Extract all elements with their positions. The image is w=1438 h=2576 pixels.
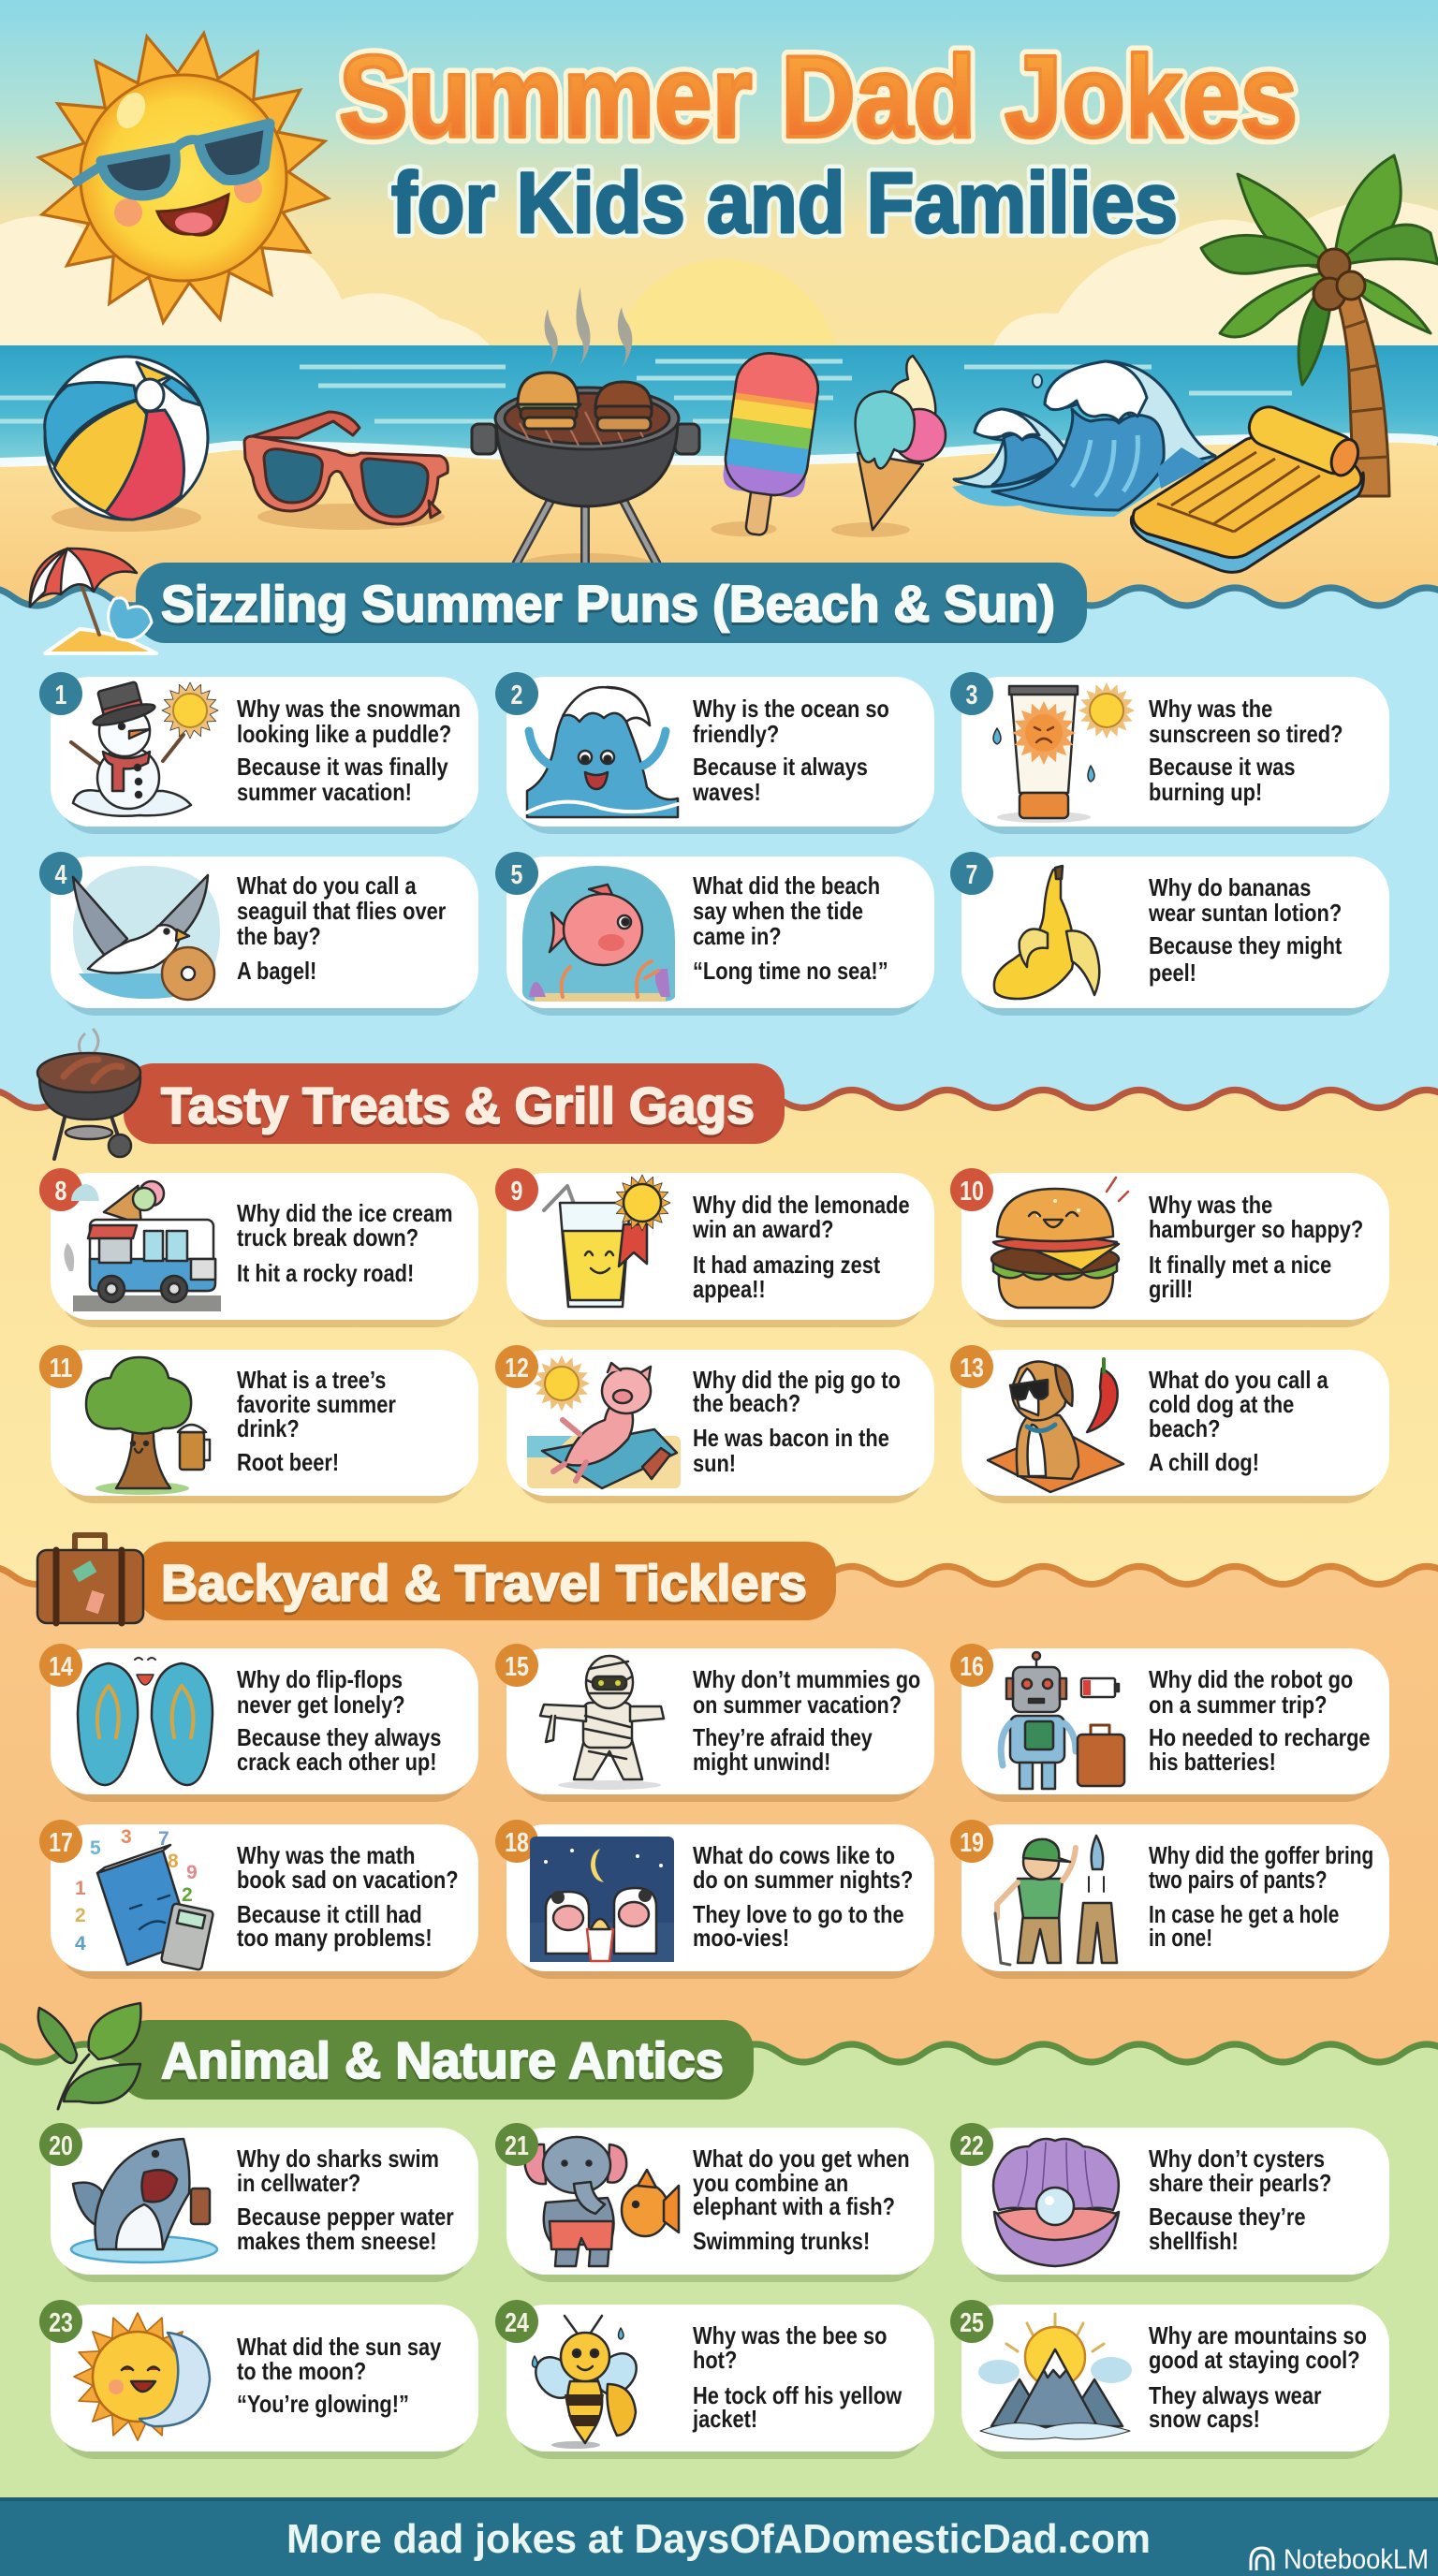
joke text: too many problems! (237, 1925, 433, 1952)
joke text: friendly? (693, 721, 779, 748)
joke text: sun! (693, 1450, 736, 1477)
joke text: seaguil that flies over (237, 898, 446, 925)
joke card 20 (39, 2123, 478, 2282)
joke text: Why did the robot go (1149, 1666, 1353, 1693)
badge 18: 18 (505, 1826, 529, 1858)
section heading: Backyard and Travel (138, 1542, 836, 1620)
joke text: Why was the bee so (693, 2322, 887, 2349)
joke text: It had amazing zest (693, 1251, 880, 1279)
joke text: on a summer trip? (1149, 1691, 1327, 1719)
joke text: Because pepper water (237, 2203, 454, 2231)
badge 2 (495, 672, 538, 715)
joke text: He was bacon in the (693, 1425, 889, 1452)
badge 14: 14 (49, 1650, 73, 1682)
joke text: Because it was (1149, 754, 1296, 781)
badge 7 (950, 852, 993, 895)
icon: sunbathing pig (527, 1355, 681, 1488)
icon: ice cream cone (831, 356, 946, 537)
joke text: his batteries! (1149, 1749, 1276, 1776)
badge 9: 9 (511, 1175, 522, 1207)
joke text: What did the beach (693, 872, 880, 900)
section heading: Sizzling Summer Puns (136, 563, 1087, 643)
joke card 24 (495, 2300, 934, 2459)
clouds (0, 200, 1438, 348)
joke text: Why did the goffer bring (1149, 1842, 1373, 1869)
badge 11: 11 (50, 1352, 72, 1383)
joke text: book sad on vacation? (237, 1866, 459, 1894)
joke text: shellfish! (1149, 2228, 1239, 2255)
icon: smiling sun with sunglasses (19, 13, 348, 343)
icon: grill with burgers (472, 286, 699, 576)
badge 4: 4 (55, 858, 67, 890)
joke text: cold dog at the (1149, 1391, 1294, 1418)
subtitle: for Kids and Families (391, 155, 1178, 251)
badge 19 (950, 1820, 993, 1863)
joke text: looking like a puddle? (237, 721, 451, 748)
joke card 25 (950, 2300, 1389, 2459)
joke card 18 (495, 1820, 934, 1979)
section heading: Animal and Nature (119, 2020, 754, 2100)
joke card 23 (39, 2300, 478, 2459)
icon: happy hamburger (991, 1178, 1128, 1308)
badge 5: 5 (511, 858, 522, 890)
joke text: appea!! (693, 1276, 766, 1303)
badge 3: 3 (966, 679, 977, 710)
icon: sad math book: 2 (75, 1905, 86, 1926)
joke text: do on summer nights? (693, 1866, 913, 1894)
icon: sad math book: 3 (121, 1826, 132, 1848)
icon: melting snowman (71, 679, 218, 816)
joke text: two pairs of pants? (1149, 1866, 1328, 1894)
icon: elephant with fish (525, 2137, 679, 2266)
badge 25 (950, 2300, 993, 2343)
joke text: hamburger so happy? (1149, 1216, 1363, 1243)
badge 21 (495, 2123, 538, 2166)
joke text: share their pearls? (1149, 2170, 1331, 2197)
joke text: truck break down? (237, 1224, 418, 1251)
icon: seagull with bagel (73, 866, 220, 1000)
wave edge: section 4 (0, 2044, 1438, 2062)
joke text: A chill dog! (1149, 1449, 1259, 1476)
joke card 4 (39, 852, 478, 1016)
section background: beach and sun (0, 588, 1438, 1123)
joke text: What do cows like to (693, 1842, 895, 1869)
section background: tasty treats (0, 1090, 1438, 1591)
icon: ocean wave (952, 361, 1217, 517)
icon: palm tree (1201, 155, 1438, 496)
joke text: What is a tree’s (237, 1367, 386, 1394)
icon: robot with suitcase (1001, 1652, 1124, 1789)
joke text: in one! (1149, 1925, 1212, 1952)
joke text: Because it was finally (237, 754, 448, 781)
icon: mummy (540, 1656, 664, 1790)
joke card 7 (950, 852, 1389, 1016)
joke card 9 (495, 1168, 934, 1327)
joke text: Root beer! (237, 1449, 339, 1476)
badge 24 (495, 2300, 538, 2343)
icon: golfer with spare pants (995, 1836, 1117, 1965)
icon: sad math book: 1 (75, 1878, 86, 1899)
section background: backyard and travel (0, 1567, 1438, 2069)
joke text: beach? (1149, 1415, 1220, 1442)
joke text: jacket! (692, 2406, 757, 2433)
joke text: He tock off his yellow (693, 2382, 902, 2409)
joke text: It finally met a nice (1149, 1251, 1331, 1279)
joke text: What do you get when (693, 2145, 910, 2173)
joke text: came in? (693, 923, 782, 950)
joke text: elephant with a fish? (693, 2193, 895, 2220)
badge 10: 10 (960, 1175, 984, 1207)
badge 23 (39, 2300, 82, 2343)
joke text: They’re afraid they (693, 1724, 873, 1752)
badge 22 (950, 2123, 993, 2166)
badge 15 (495, 1644, 538, 1687)
section heading: Tasty Treats (124, 1063, 785, 1144)
joke text: Why was the (1149, 1192, 1272, 1219)
icon: ice cream truck (64, 1178, 221, 1311)
joke text: drink? (237, 1415, 300, 1442)
joke text: say when the tide (693, 898, 863, 925)
joke card 2 (495, 672, 934, 834)
badge 20: 20 (49, 2130, 73, 2161)
joke text: Why don’t mummies go (693, 1666, 920, 1694)
joke text: to the moon? (237, 2358, 366, 2385)
joke text: wear suntan lotion? (1148, 900, 1342, 927)
badge 13: 13 (960, 1352, 984, 1383)
joke text: summer vacation! (237, 779, 412, 806)
badge 23: 23 (49, 2306, 73, 2338)
shoreline foam (0, 437, 1438, 462)
badge 17 (39, 1820, 82, 1863)
section heading: Sizzling Summer Puns: Sizzling Summer Puns (Beach & Sun) (161, 575, 1055, 633)
badge 17: 17 (49, 1826, 73, 1858)
wave edge: section 1 (0, 588, 1438, 606)
icon: tree with root beer (86, 1357, 210, 1495)
badge 16 (950, 1644, 993, 1687)
joke text: in cellwater? (237, 2170, 360, 2197)
joke text: favorite summer (237, 1391, 396, 1418)
joke text: Why are mountains so (1149, 2322, 1367, 2349)
joke card 5 (495, 852, 934, 1016)
badge 8 (39, 1168, 82, 1211)
badge 11 (39, 1345, 82, 1388)
badge 1 (39, 672, 82, 715)
joke text: Why was the snowman (237, 695, 461, 723)
badge 7: 7 (966, 858, 977, 890)
icon: beach ball (45, 357, 208, 532)
joke text: Because they always (237, 1724, 441, 1751)
badge 13 (950, 1345, 993, 1388)
badge 12 (495, 1345, 538, 1388)
badge 10 (950, 1168, 993, 1211)
section background: animal and nature (0, 2044, 1438, 2509)
joke card 13 (950, 1345, 1389, 1503)
badge 18 (495, 1820, 538, 1863)
wave edge: section 3 (0, 1567, 1438, 1584)
joke text: A bagel! (237, 958, 316, 985)
icon: beach umbrella and wave (30, 549, 156, 653)
icon: sad math book: 8 (168, 1851, 179, 1872)
joke text: you combine an (693, 2170, 848, 2197)
joke text: They love to go to the (693, 1901, 904, 1928)
joke text: What do you call a (237, 872, 417, 900)
joke text: waves! (692, 779, 761, 806)
joke text: Because they’re (1149, 2203, 1305, 2231)
icon: flip-flops (78, 1658, 213, 1785)
joke card 21 (495, 2123, 934, 2282)
section heading: Animal and Nature: Animal & Nature Antics (161, 2031, 724, 2089)
joke text: Why do bananas (1149, 874, 1311, 901)
joke card 19 (950, 1820, 1389, 1979)
badge 15: 15 (505, 1650, 529, 1682)
title: Summer Dad Jokes (339, 33, 1298, 162)
icon: lemonade with award (544, 1175, 670, 1307)
joke text: Why did the ice cream (237, 1200, 453, 1227)
badge 20 (39, 2123, 82, 2166)
icon: cows at the movies (530, 1837, 674, 1962)
badge 21: 21 (505, 2130, 529, 2161)
joke text: moo-vies! (693, 1925, 789, 1952)
joke text: Why was the (1149, 695, 1272, 723)
joke text: sunscreen so tired? (1149, 721, 1343, 748)
joke text: the beach? (693, 1390, 800, 1417)
joke card 15 (495, 1644, 934, 1802)
joke text: good at staying cool? (1149, 2347, 1360, 2374)
icon: sneezing shark (71, 2139, 217, 2262)
badge 9 (495, 1168, 538, 1211)
joke text: crack each other up! (237, 1749, 437, 1776)
badge 12: 12 (505, 1352, 529, 1383)
joke text: on summer vacation? (693, 1691, 902, 1720)
title: Summer Dad Jokes (339, 33, 1298, 162)
icon: friendly ocean wave (527, 687, 678, 817)
joke text: Swimming trunks! (693, 2228, 870, 2255)
icon: rainbow popsicle (709, 348, 822, 549)
joke text: burning up! (1149, 779, 1262, 806)
joke card 17 (39, 1820, 478, 1979)
joke text: Why was the math (237, 1842, 415, 1869)
icon: red sunglasses (244, 412, 448, 530)
ocean (0, 345, 1438, 472)
icon: pink fish underwater (522, 866, 675, 1002)
icon: pearl in shell (993, 2139, 1119, 2266)
badge 16: 16 (960, 1650, 984, 1682)
subtitle: for Kids and Families (391, 155, 1178, 251)
joke text: never get lonely? (237, 1691, 405, 1719)
joke text: makes them sneese! (237, 2228, 437, 2255)
joke text: Because it always (693, 754, 868, 781)
joke card 12 (495, 1345, 934, 1503)
joke card 22 (950, 2123, 1389, 2282)
joke card 3 (950, 672, 1389, 834)
badge 24: 24 (505, 2306, 529, 2338)
badge 4 (39, 852, 82, 895)
footer text: More dad jokes at DaysOfADomesticDad.com (286, 2516, 1151, 2562)
icon: green leaves (38, 2003, 140, 2109)
badge 8: 8 (55, 1175, 66, 1207)
badge 25: 25 (960, 2306, 984, 2338)
icon: pool float (1131, 402, 1363, 572)
setting sun (610, 259, 839, 488)
joke text: win an award? (692, 1216, 833, 1243)
joke card 8 (39, 1168, 478, 1327)
section heading: Tasty Treats: Tasty Treats & Grill Gags (161, 1076, 755, 1134)
joke text: Because it ctill had (237, 1901, 422, 1928)
joke text: grill! (1149, 1276, 1193, 1303)
joke text: Why did the lemonade (693, 1192, 910, 1219)
section heading: Backyard and Travel: Backyard & Travel Ticklers (161, 1554, 807, 1612)
icon: hot bee (528, 2316, 644, 2449)
joke text: might unwind! (693, 1749, 830, 1777)
joke text: Why don’t cysters (1149, 2145, 1325, 2173)
wave edge: section 2 (0, 1090, 1438, 1108)
joke text: hot? (693, 2347, 737, 2374)
joke text: What do you call a (1149, 1367, 1328, 1394)
icon: sad math book: 9 (186, 1862, 198, 1883)
joke card 1 (39, 672, 478, 834)
icon: sad math book (75, 1826, 213, 1970)
joke text: In case he get a hole (1149, 1901, 1339, 1928)
icon: sad math book: 7 (158, 1828, 169, 1850)
joke text: Because they might (1149, 932, 1342, 959)
badge 22: 22 (960, 2130, 984, 2161)
icon: kettle grill (37, 1030, 140, 1159)
badge 1: 1 (55, 679, 66, 710)
joke text: Why do flip-flops (237, 1666, 403, 1693)
joke card 11 (39, 1345, 478, 1503)
joke text: snow caps! (1149, 2406, 1260, 2433)
joke text: the bay? (237, 923, 321, 950)
icon: suitcase (37, 1535, 143, 1623)
footer band (0, 2497, 1438, 2576)
badge 14 (39, 1644, 82, 1687)
joke text: “Long time no sea!” (693, 958, 888, 985)
icon: sad math book: 2 (182, 1884, 193, 1906)
joke card 10 (950, 1168, 1389, 1327)
icon: dog with sunglasses and chili (988, 1359, 1123, 1492)
sky background (0, 0, 1438, 348)
joke text: Why did the pig go to (693, 1367, 901, 1394)
badge 3 (950, 672, 993, 715)
badge 19: 19 (960, 1826, 984, 1858)
icon: sad math book: 4 (75, 1933, 86, 1954)
joke text: Ho needed to recharge (1149, 1724, 1371, 1751)
joke text: “You’re glowing!” (237, 2391, 409, 2418)
beach sand (0, 441, 1438, 618)
icon: sun and moon (74, 2313, 210, 2440)
badge 2: 2 (511, 679, 522, 710)
joke text: What did the sun say (237, 2334, 442, 2361)
joke text: Why do sharks swim (237, 2145, 439, 2173)
joke text: peel! (1149, 959, 1196, 987)
icon: peeled banana (994, 866, 1099, 999)
badge 5 (495, 852, 538, 895)
joke text: It hit a rocky road! (237, 1260, 414, 1287)
joke text: They always wear (1149, 2382, 1321, 2409)
icon: sad math book: 5 (90, 1837, 101, 1859)
joke text: Why is the ocean so (693, 695, 889, 723)
joke card 16 (950, 1644, 1389, 1802)
joke card 14 (39, 1644, 478, 1802)
icon: tired sunscreen tube (993, 682, 1135, 823)
icon: sunny mountains (978, 2314, 1132, 2439)
